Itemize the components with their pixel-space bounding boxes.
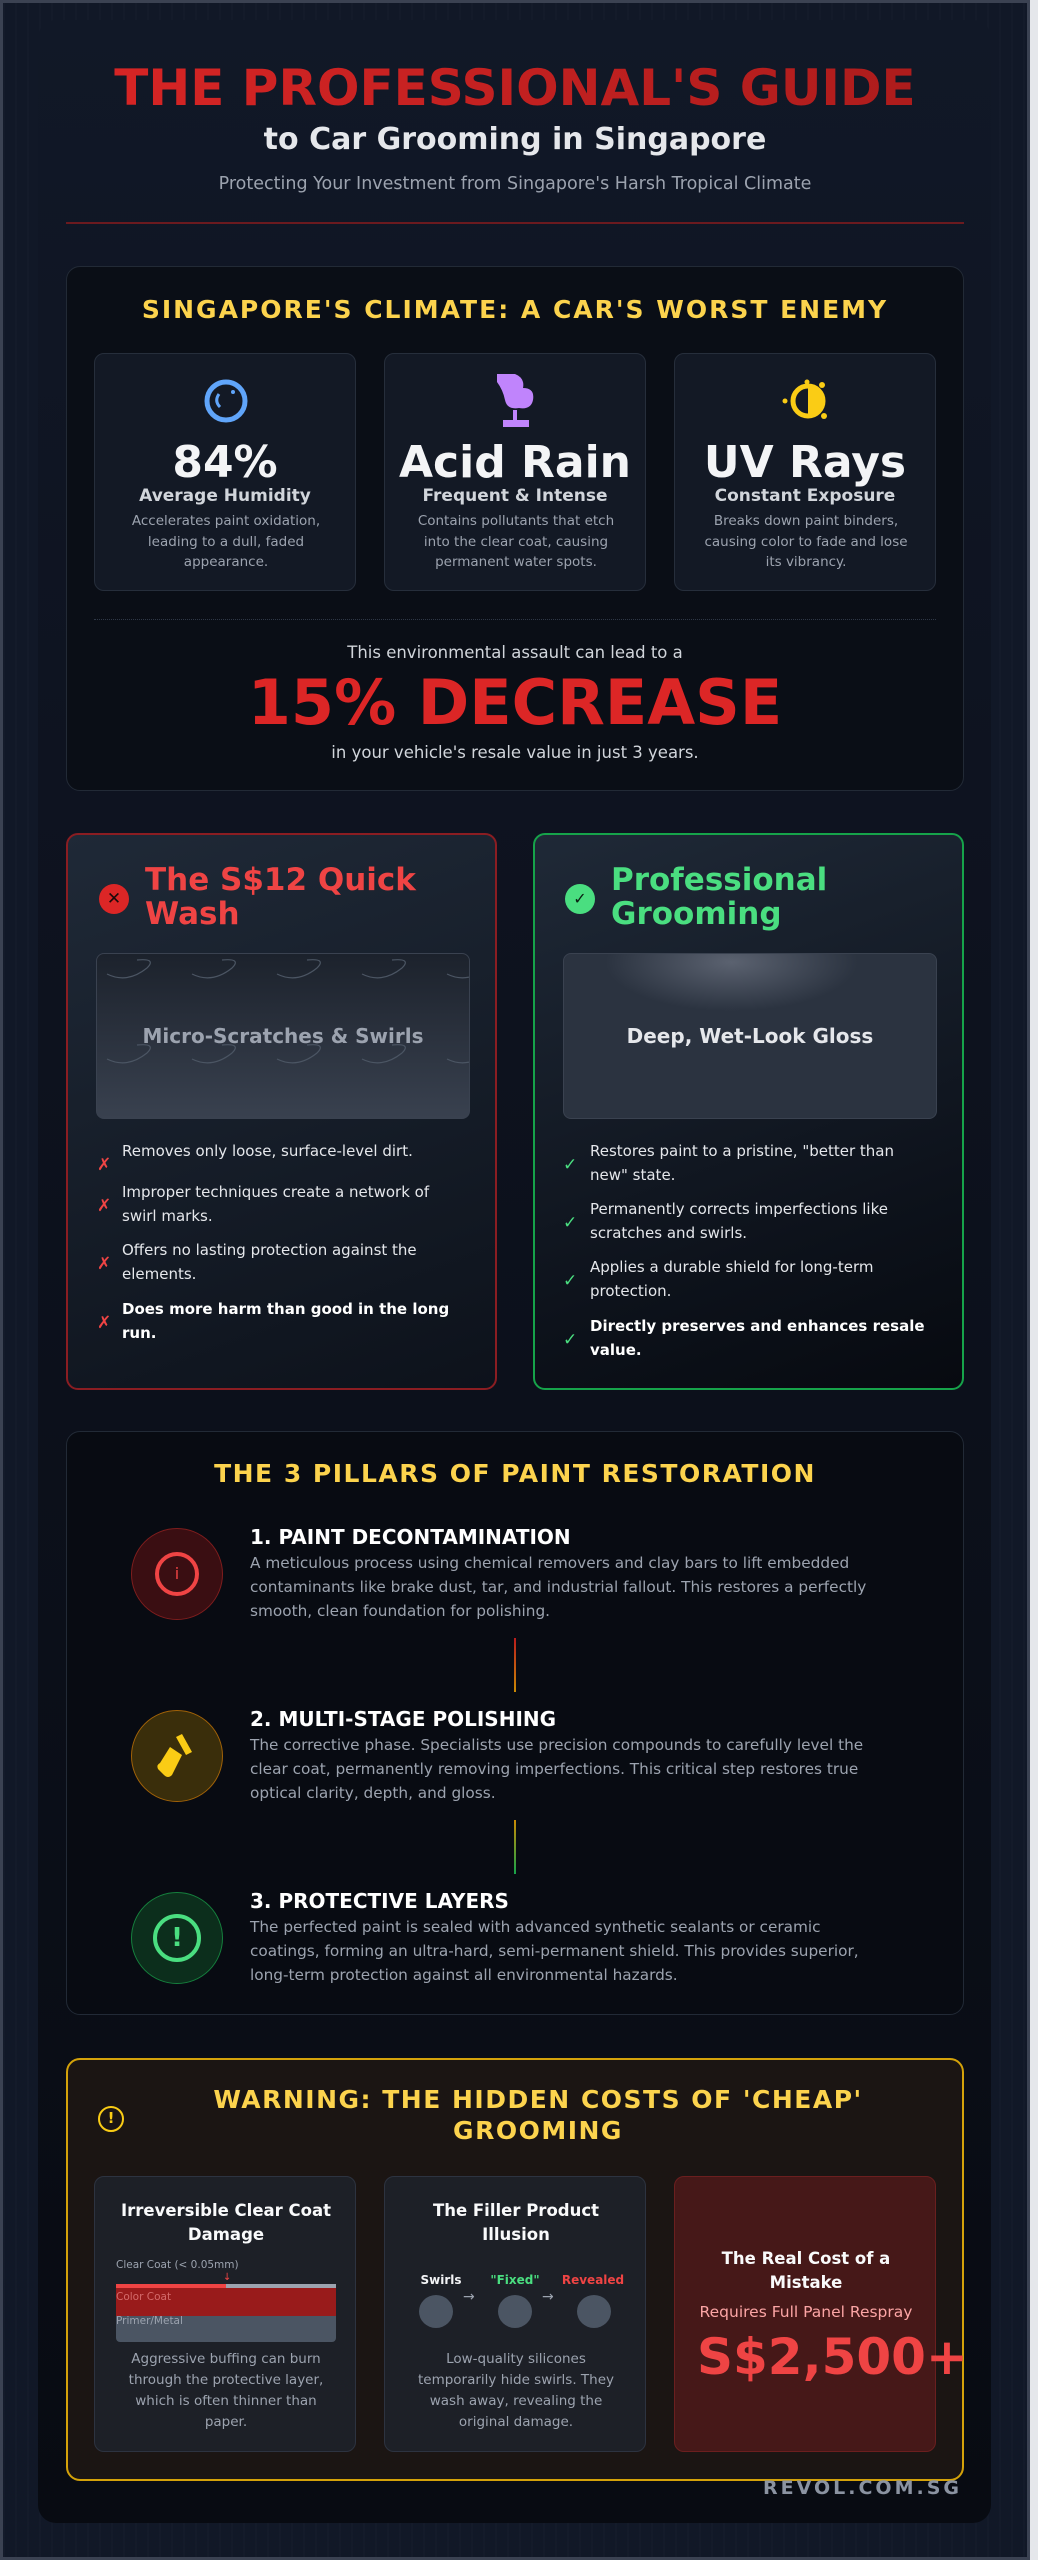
card: humidity: Average Humidity — [139, 486, 311, 506]
list: quick wash cons: Offers no lasting protection against the elements. — [122, 1241, 417, 1283]
icon: decontamination: i — [175, 1564, 179, 1583]
icon: warning: ! — [108, 2109, 114, 2127]
list: professional pros — [563, 1142, 925, 1359]
diagram: paint layers — [116, 2259, 336, 2342]
image: scratches — [96, 953, 470, 1119]
panel: warning — [66, 2058, 964, 2481]
diagram: paint layers: ↓ — [223, 2272, 231, 2283]
heading: professional — [611, 862, 827, 932]
panel: climate — [66, 266, 964, 791]
text: pillar 1: A meticulous process using chemical removers and clay bars to lift embedded contaminants like brake dust, tar, and industrial fallout. This restores a perfectly smooth, clean foundation for polishing. — [250, 1554, 866, 1620]
tagline: Protecting Your Investment from Singapore's Harsh Tropical Climate — [219, 174, 811, 194]
card: clear coat damage — [94, 2176, 356, 2452]
list: quick wash cons: ✗ — [97, 1196, 111, 1216]
card: acid rain: Acid Rain — [399, 437, 631, 488]
card: acid rain: Frequent & Intense — [423, 486, 607, 506]
list: professional pros: ✓ — [563, 1213, 577, 1233]
diagram: paint layers: Color Coat — [116, 2291, 171, 2303]
text: pillar 2 — [250, 1707, 863, 1802]
card: clear coat damage: Aggressive buffing can burn through the protective layer, which is often thinner than paper. — [129, 2351, 323, 2430]
panel: pillars — [66, 1431, 964, 2015]
heading: professional: Grooming — [611, 896, 782, 932]
card: humidity: Accelerates paint oxidation, leading to a dull, faded appearance. — [132, 513, 320, 570]
card: uv: UV Rays — [704, 437, 906, 488]
heading: professional: Professional — [611, 862, 827, 898]
text: resale decrease: 15% DECREASE — [248, 666, 782, 739]
card: filler illusion: The Filler Product Illusion — [433, 2201, 599, 2244]
icon: acid rain — [497, 374, 534, 427]
list: professional pros: ✓ — [563, 1271, 577, 1291]
icon: shield: ! — [171, 1923, 183, 1953]
list: professional pros: Applies a durable shield for long-term protection. — [590, 1258, 873, 1300]
diagram: filler: "Fixed" — [490, 2273, 540, 2287]
card: clear coat damage: Irreversible Clear Coat Damage — [121, 2201, 331, 2244]
card: real cost: The Real Cost of a Mistake — [722, 2249, 890, 2292]
diagram: filler: Revealed — [562, 2273, 624, 2287]
heading: quick wash — [145, 862, 416, 932]
icon: warning — [98, 2106, 124, 2132]
text: resale decrease: This environmental assault can lead to a — [347, 643, 683, 662]
diagram: paint layers: Primer/Metal — [116, 2315, 183, 2327]
panel: professional grooming — [533, 833, 964, 1390]
text: pillar 3: The perfected paint is sealed with advanced synthetic sealants or ceramic coatings, forming an ultra-hard, semi-permanent shield. This provides superior, long-term protection against all environmental hazards. — [250, 1918, 859, 1984]
list: professional pros: Directly preserves and enhances resale value. — [590, 1317, 925, 1359]
card: filler illusion — [384, 2176, 646, 2452]
card: acid rain: Contains pollutants that etch into the clear coat, causing permanent water spots. — [418, 513, 614, 570]
list: quick wash cons — [97, 1142, 449, 1342]
card: real cost — [674, 2176, 936, 2452]
icon: polisher — [131, 1710, 223, 1802]
panel: quick wash — [66, 833, 497, 1390]
list: professional pros: ✓ — [563, 1155, 577, 1175]
icon: x circle — [99, 884, 129, 914]
diagram: filler — [419, 2273, 624, 2328]
card: uv: Breaks down paint binders, causing color to fade and lose its vibrancy. — [704, 513, 908, 570]
list: professional pros: Restores paint to a pristine, "better than new" state. — [590, 1142, 894, 1184]
diagram: paint layers: Clear Coat (< 0.05mm) — [116, 2259, 239, 2271]
list: quick wash cons: Removes only loose, surface-level dirt. — [122, 1142, 413, 1160]
card: humidity — [94, 353, 356, 591]
icon: sun — [782, 380, 827, 419]
card: acid rain — [384, 353, 646, 591]
icon: decontamination — [131, 1528, 223, 1620]
title: THE PROFESSIONAL'S GUIDE — [114, 59, 916, 117]
diagram: filler: → — [542, 2289, 554, 2305]
image: gloss — [563, 953, 937, 1119]
list: quick wash cons: ✗ — [97, 1254, 111, 1274]
list: quick wash cons: Improper techniques create a network of swirl marks. — [122, 1183, 429, 1225]
icon: water drop — [204, 380, 248, 422]
text: resale decrease: in your vehicle's resale value in just 3 years. — [331, 743, 699, 762]
icon: check circle: ✓ — [573, 889, 587, 908]
text: pillar 3: 3. PROTECTIVE LAYERS — [250, 1889, 509, 1913]
text: resale decrease — [248, 643, 782, 762]
pillar 2 — [131, 1710, 223, 1802]
heading: climate: SINGAPORE'S CLIMATE: A CAR'S WORST ENEMY — [142, 295, 888, 324]
image: scratches: Micro-Scratches & Swirls — [142, 1024, 424, 1048]
subtitle: to Car Grooming in Singapore — [264, 122, 766, 157]
text: pillar 2: 2. MULTI-STAGE POLISHING — [250, 1707, 556, 1731]
list: professional pros: ✓ — [563, 1330, 577, 1350]
diagram: filler: → — [463, 2289, 475, 2305]
heading: quick wash: The S$12 Quick — [145, 862, 416, 898]
text: pillar 1: 1. PAINT DECONTAMINATION — [250, 1525, 571, 1549]
heading: warning: WARNING: THE HIDDEN COSTS OF 'CHEAP' GROOMING — [213, 2085, 863, 2145]
heading: pillars: THE 3 PILLARS OF PAINT RESTORATION — [214, 1459, 816, 1488]
icon: x circle: ✕ — [107, 889, 121, 909]
footer: brand: REVOL.COM.SG — [763, 2477, 962, 2499]
stat: cost: S$2,500+ — [697, 2328, 968, 2386]
card: uv — [674, 353, 936, 591]
icon: shield — [131, 1892, 223, 1984]
text: pillar 3 — [250, 1889, 859, 1984]
text: pillar 1 — [250, 1525, 866, 1620]
card: real cost: Requires Full Panel Respray — [700, 2303, 912, 2321]
card: humidity: 84% — [172, 437, 278, 488]
list: quick wash cons: Does more harm than good in the long run. — [122, 1300, 449, 1342]
list: quick wash cons: ✗ — [97, 1313, 111, 1333]
diagram: filler: Swirls — [420, 2273, 462, 2287]
card: filler illusion: Low-quality silicones temporarily hide swirls. They wash away, revealing the original damage. — [418, 2351, 614, 2430]
list: quick wash cons: ✗ — [97, 1155, 111, 1175]
list: professional pros: Permanently corrects imperfections like scratches and swirls. — [590, 1200, 888, 1242]
card: uv: Constant Exposure — [715, 486, 895, 506]
heading: quick wash: Wash — [145, 896, 240, 932]
text: pillar 2: The corrective phase. Specialists use precision compounds to carefully level the clear coat, permanently removing imperfections. This critical step restores true optical clarity, depth, and gloss. — [250, 1736, 863, 1802]
icon: check circle — [565, 884, 595, 914]
image: gloss: Deep, Wet-Look Gloss — [627, 1024, 873, 1048]
